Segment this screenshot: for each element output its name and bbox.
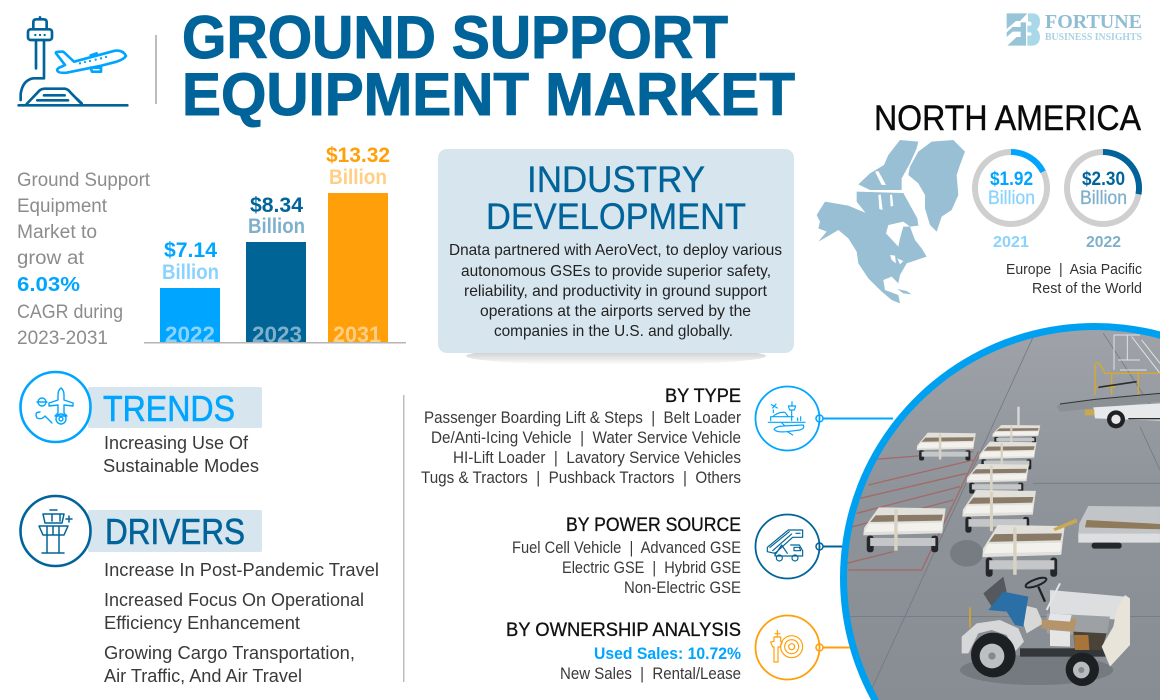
panel: industry development: companies in the U.S. and globally. xyxy=(494,323,733,340)
heading: drivers: DRIVERS xyxy=(105,511,245,552)
drivers text: Efficiency Enhancement xyxy=(104,613,300,633)
donut: 2022: $2.30 xyxy=(1082,169,1125,190)
segment: by type: De/Anti-Icing Vehicle | Water Service Vehicle xyxy=(431,429,741,447)
connector: by type xyxy=(816,415,893,422)
ring around photo xyxy=(840,323,1160,700)
segment: by power source: Non-Electric GSE xyxy=(624,579,741,597)
icon: by ownership xyxy=(756,616,820,680)
segment: by power source: Electric GSE | Hybrid GSE xyxy=(562,559,741,577)
bar chart: $8.34 xyxy=(250,194,303,217)
belt loader xyxy=(1057,335,1160,428)
donut: 2021: $1.92 xyxy=(990,169,1033,190)
map: North America xyxy=(817,140,965,303)
panel: industry development: DEVELOPMENT xyxy=(486,196,746,237)
heading: North America: NORTH AMERICA xyxy=(874,99,1142,138)
heading: trends: TRENDS xyxy=(103,388,235,429)
drivers text: Increased Focus On Operational xyxy=(104,590,364,610)
logo: Fortune Business Insights xyxy=(1007,11,1142,46)
CAGR text block: CAGR during xyxy=(17,302,123,323)
icon: drivers xyxy=(20,496,90,566)
bar chart: $13.32 xyxy=(326,144,390,167)
segment: by power source: BY POWER SOURCE xyxy=(566,515,741,536)
bar chart: 2022 xyxy=(165,322,215,347)
connector: by ownership xyxy=(816,644,850,651)
icon: airport tower and plane xyxy=(19,17,127,105)
segment: by power source xyxy=(512,515,741,597)
donut: 2022 xyxy=(1067,152,1139,251)
CAGR text block: Market to xyxy=(17,222,97,243)
donut: 2021: 2021 xyxy=(993,234,1029,251)
panel: industry development: reliability, and productivity in ground support xyxy=(464,283,768,300)
vertical divider xyxy=(403,395,404,682)
connector: by power source xyxy=(816,543,842,550)
segment: by power source: Fuel Cell Vehicle | Advanced GSE xyxy=(512,539,741,557)
drivers band xyxy=(88,510,262,552)
bar chart: Billion xyxy=(248,215,305,238)
CAGR text block: 2023-2031 xyxy=(17,328,108,349)
panel: industry development: operations at the airports served by the xyxy=(480,303,751,320)
title: GROUND SUPPORT xyxy=(182,4,728,71)
segment: by ownership analysis: Used Sales: 10.72% xyxy=(594,645,741,663)
photo: ground support vehicles on apron xyxy=(840,320,1160,700)
other regions text xyxy=(1006,261,1142,297)
drivers text: Increase In Post-Pandemic Travel xyxy=(104,560,379,580)
donut: 2021 xyxy=(975,152,1047,251)
CAGR text block: grow at xyxy=(17,248,85,269)
logo: Fortune Business Insights: FORTUNE xyxy=(1045,11,1142,33)
drivers text: Air Traffic, And Air Travel xyxy=(104,666,302,686)
segment: by type: Passenger Boarding Lift & Steps | Belt Loader xyxy=(424,409,741,427)
donut: 2021: Billion xyxy=(988,188,1035,209)
segment: by ownership analysis xyxy=(506,620,741,683)
CAGR text block: Ground Support xyxy=(17,170,151,191)
bar chart: 2023 xyxy=(252,322,302,347)
header divider xyxy=(155,35,157,104)
bar chart: Billion xyxy=(329,166,387,189)
segment: by type: Tugs & Tractors | Pushback Tractors | Others xyxy=(421,469,741,487)
bar chart: $7.14 xyxy=(164,239,217,262)
panel: industry development: autonomous GSEs to provide superior safety, xyxy=(461,263,771,280)
bar chart xyxy=(144,144,406,347)
CAGR text block: 6.03% xyxy=(17,274,80,296)
segment: by ownership analysis: BY OWNERSHIP ANALYSIS xyxy=(506,620,741,641)
segment: by type: BY TYPE xyxy=(665,386,741,407)
donut: 2022: Billion xyxy=(1080,188,1127,209)
trends text: Increasing Use Of xyxy=(104,433,249,453)
donut: 2022: 2022 xyxy=(1086,234,1121,251)
panel: industry development xyxy=(438,149,794,365)
other regions text: Europe | Asia Pacific xyxy=(1006,261,1142,278)
icon: by power source xyxy=(756,514,820,578)
trends band xyxy=(88,387,262,428)
drivers text xyxy=(104,560,379,686)
segment: by type: HI-Lift Loader | Lavatory Service Vehicles xyxy=(453,449,741,467)
segment: by type xyxy=(421,386,741,487)
title xyxy=(182,4,795,128)
panel: industry development: INDUSTRY xyxy=(527,159,705,200)
title: EQUIPMENT MARKET xyxy=(182,61,795,128)
trends text: Sustainable Modes xyxy=(103,456,259,476)
icon: by type xyxy=(756,386,820,450)
trends text xyxy=(103,433,259,476)
tug xyxy=(960,576,1130,686)
CAGR text block xyxy=(17,170,151,349)
segment: by ownership analysis: New Sales | Rental/Lease xyxy=(560,665,741,683)
logo: Fortune Business Insights: BUSINESS INSIGHTS xyxy=(1045,32,1142,43)
other regions text: Rest of the World xyxy=(1032,280,1142,297)
icon: trends xyxy=(20,372,90,442)
drivers text: Growing Cargo Transportation, xyxy=(104,643,355,663)
bar chart: 2031 xyxy=(333,322,381,347)
panel: industry development: Dnata partnered with AeroVect, to deploy various xyxy=(449,242,782,259)
bar chart: Billion xyxy=(162,261,219,284)
CAGR text block: Equipment xyxy=(17,196,108,217)
